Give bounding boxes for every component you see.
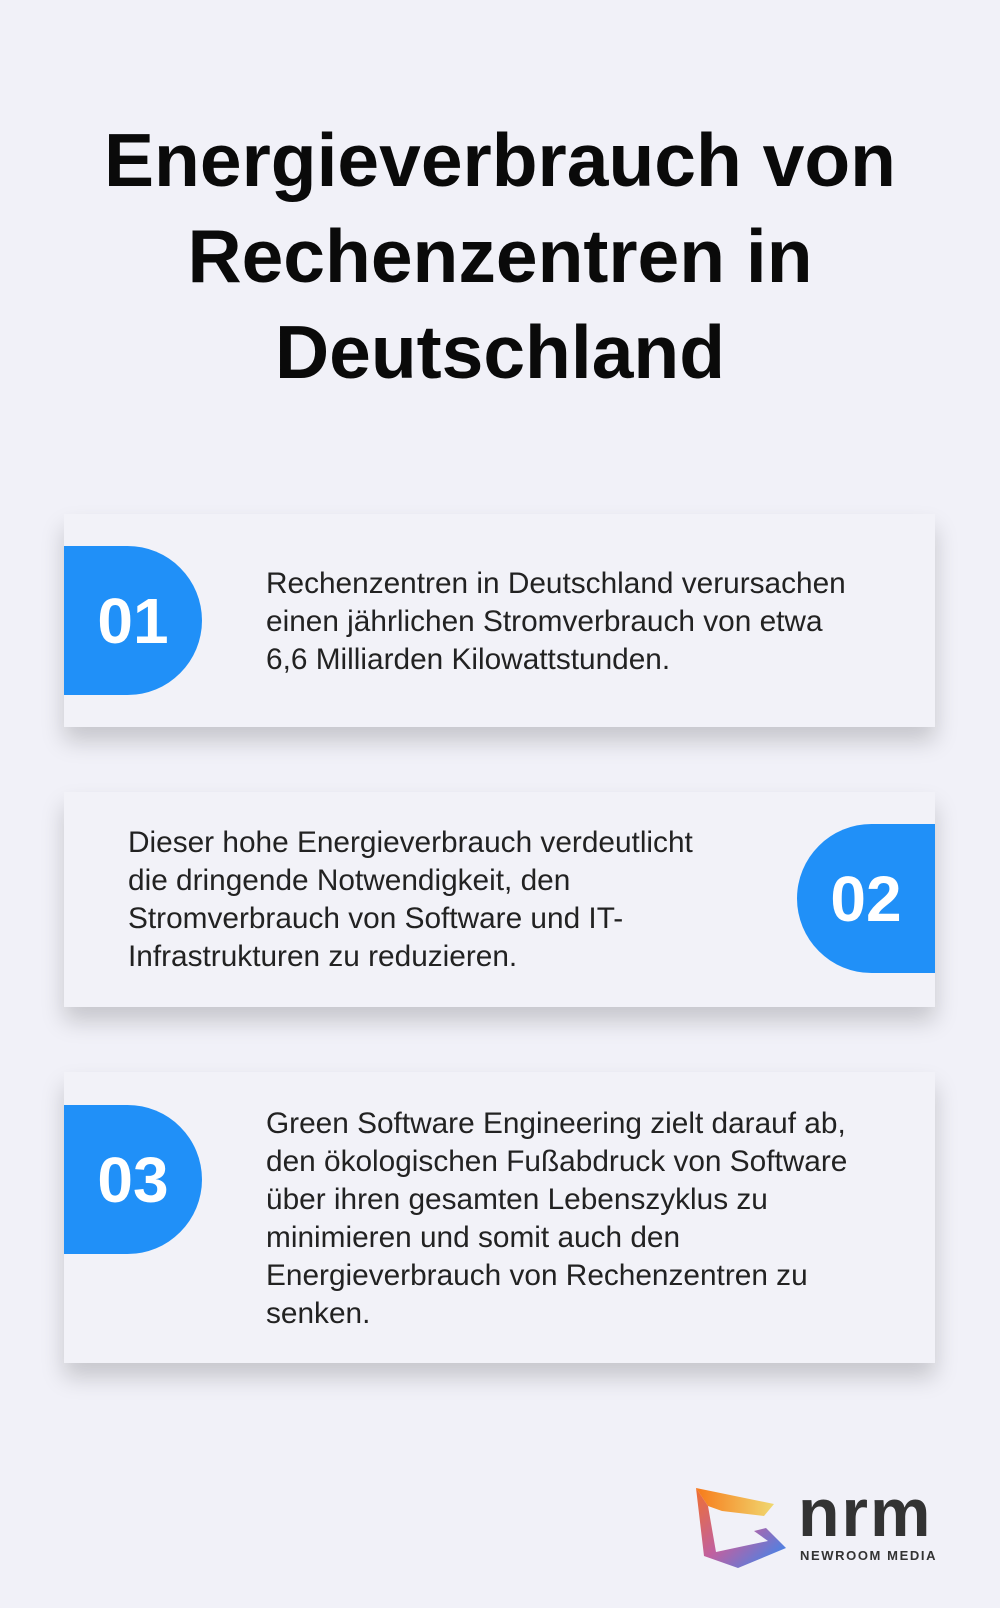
text 3: Green Software Engineering zielt darauf ab, [266,1107,846,1140]
badge 01 [64,546,202,695]
badge 03: 03 [97,1144,169,1216]
logo text: nrm [798,1475,932,1551]
logo: NEWROOM MEDIA [800,1548,937,1563]
text 1 [266,567,846,676]
text 1: Rechenzentren in Deutschland verursachen [266,567,846,600]
text 1: 6,6 Milliarden Kilowattstunden. [266,643,670,676]
text 1: einen jährlichen Stromverbrauch von etwa [266,605,823,638]
text 2: Dieser hohe Energieverbrauch verdeutlicht [128,826,693,859]
title: Deutschland [275,310,725,394]
text 2 [128,826,693,973]
text 3: Energieverbrauch von Rechenzentren zu [266,1259,808,1292]
badge 02: 02 [830,862,902,934]
logo [696,1475,937,1568]
text 3 [266,1107,847,1330]
title: Energieverbrauch von [104,118,896,202]
text 3: den ökologischen Fußabdruck von Software [266,1145,847,1178]
badge 01: 01 [97,584,169,656]
title: Rechenzentren in [187,214,813,298]
badge 03 [64,1105,202,1254]
text 3: über ihren gesamten Lebenszyklus zu [266,1183,768,1216]
badge 02 [797,824,935,973]
icon: logo mark [696,1488,786,1568]
text 2: Infrastrukturen zu reduzieren. [128,940,517,973]
text 3: senken. [266,1297,370,1330]
panel: card 3 [64,1072,935,1363]
title [104,118,896,394]
panel: card 1 [64,514,935,727]
panel: card 2 [64,792,935,1007]
text 3: minimieren und somit auch den [266,1221,680,1254]
text 2: Stromverbrauch von Software und IT- [128,902,623,935]
text 2: die dringende Notwendigkeit, den [128,864,570,897]
